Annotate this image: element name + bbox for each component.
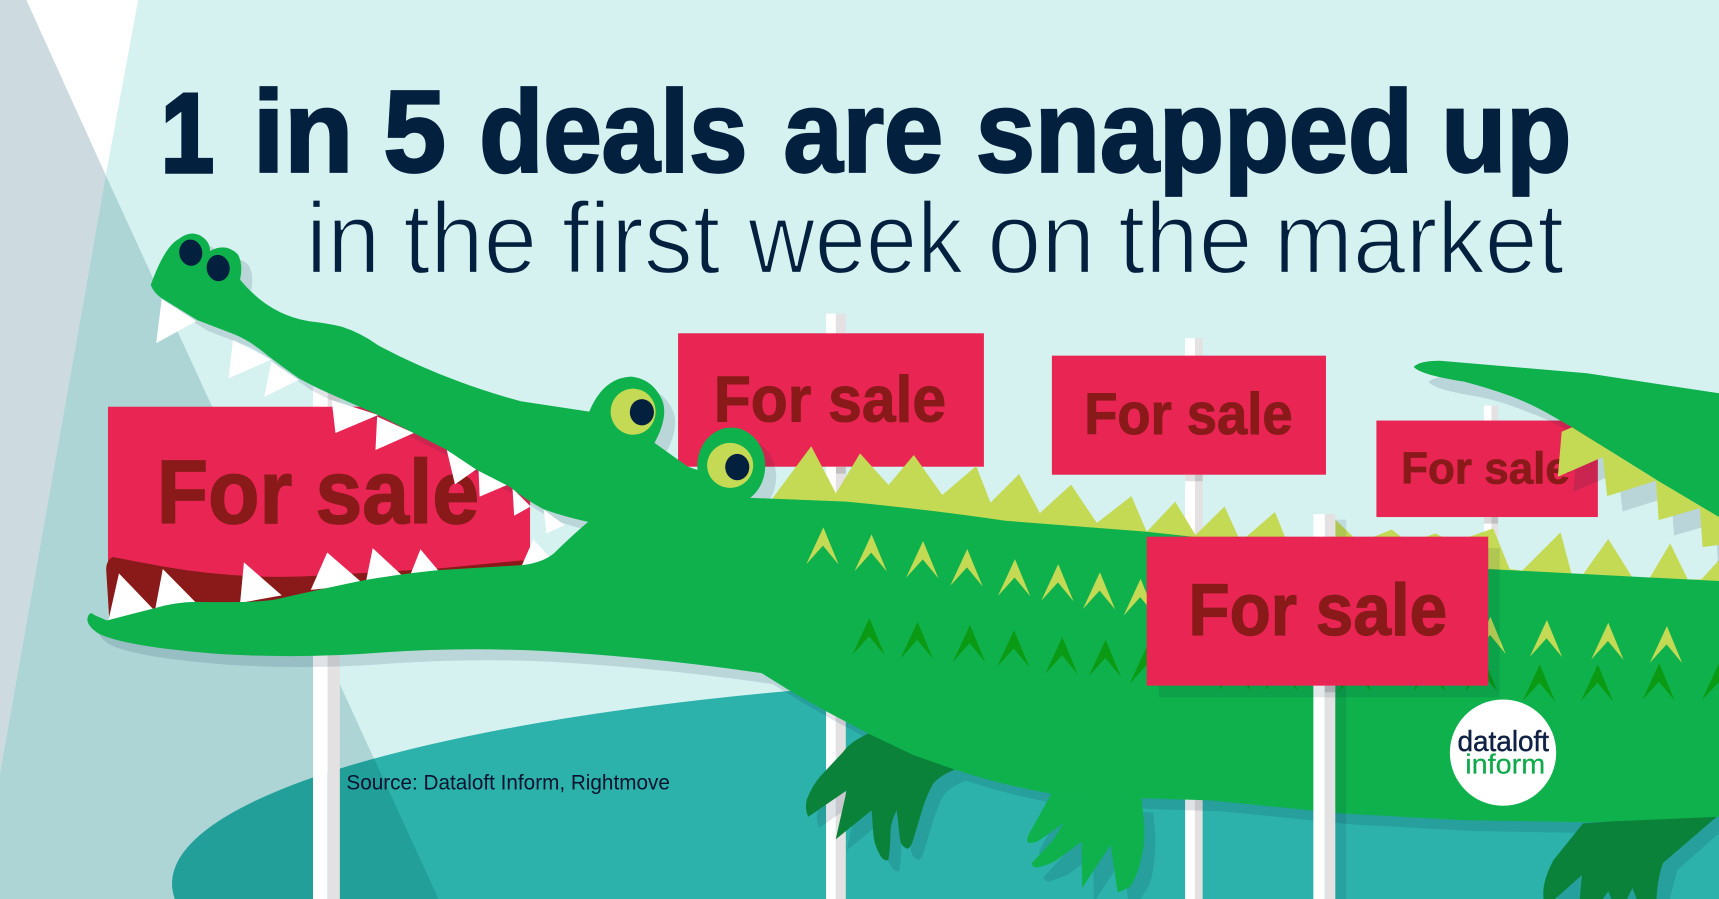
dataloft inform logo: inform bbox=[1465, 748, 1545, 779]
eye far bbox=[707, 443, 753, 488]
sign post 2 bbox=[826, 314, 846, 899]
spotlight beam: grey left wedge bbox=[0, 0, 106, 773]
headline: 5 bbox=[383, 67, 446, 197]
headline bbox=[161, 67, 1571, 197]
tail teeth bbox=[1558, 427, 1719, 547]
sign: for sale 2 bbox=[678, 333, 984, 467]
sign post 1 bbox=[313, 384, 340, 899]
headline: are bbox=[784, 67, 943, 197]
tail bbox=[1414, 361, 1719, 517]
sign: for sale 3 bbox=[1052, 356, 1326, 475]
headline: deals bbox=[479, 67, 747, 197]
sub-headline: market bbox=[1274, 183, 1564, 295]
sign 5 shadow bbox=[1159, 548, 1500, 697]
crocodile body bbox=[87, 234, 1719, 822]
sub-headline: week bbox=[747, 183, 964, 295]
dark green scale marks bbox=[852, 618, 1719, 702]
spotlight beam: overlap shade bbox=[0, 175, 439, 899]
headline: up bbox=[1441, 67, 1571, 197]
sub-headline: first bbox=[562, 183, 720, 295]
back leg (dark) bbox=[806, 733, 955, 860]
sign post 3 bbox=[1185, 338, 1203, 899]
headline: 1 bbox=[161, 71, 214, 196]
sign: for sale 4: For sale bbox=[1401, 444, 1570, 493]
sub-headline: the bbox=[1118, 183, 1253, 295]
back ridge spikes bbox=[773, 446, 1719, 592]
teal pond bbox=[172, 673, 1719, 899]
dataloft inform logo bbox=[1450, 699, 1556, 806]
sign: for sale 4 bbox=[1376, 421, 1598, 517]
sign: for sale 5 (front) bbox=[1147, 537, 1488, 686]
pond shaded by beam bbox=[172, 758, 438, 899]
sign post 4 bbox=[1484, 406, 1498, 548]
headline: in bbox=[253, 67, 353, 197]
crocodile mouth lining bbox=[106, 557, 523, 625]
sign: for sale 1 (large, in mouth): For sale bbox=[157, 443, 479, 543]
sub-headline: on bbox=[987, 183, 1095, 295]
sub-headline: in bbox=[306, 183, 380, 295]
sign: for sale 1 (large, in mouth) bbox=[108, 407, 530, 586]
far eye bump bbox=[697, 428, 765, 504]
tail / upper jaw shadow bbox=[1428, 376, 1719, 562]
upper teeth bbox=[156, 299, 565, 533]
crocodile drop shadow bbox=[98, 244, 1719, 899]
eye near bbox=[611, 389, 656, 435]
dataloft inform logo: dataloft bbox=[1458, 726, 1549, 758]
source note: Source: Dataloft Inform, Rightmove bbox=[346, 770, 670, 794]
lime back scale marks bbox=[806, 527, 1682, 663]
sign: for sale 3: For sale bbox=[1084, 382, 1293, 447]
sign: for sale 2: For sale bbox=[714, 363, 946, 436]
lower teeth bbox=[107, 537, 572, 625]
nostrils bbox=[178, 238, 231, 283]
right back leg (dark) bbox=[1543, 817, 1717, 899]
sign post 5 bbox=[1313, 514, 1346, 899]
sub-headline bbox=[306, 183, 1564, 295]
sign: for sale 5 (front): For sale bbox=[1188, 569, 1447, 651]
front leg bbox=[1027, 794, 1144, 892]
spotlight beam: white wedge bbox=[26, 0, 138, 175]
sub-headline: the bbox=[403, 183, 537, 295]
headline: snapped bbox=[976, 67, 1413, 197]
